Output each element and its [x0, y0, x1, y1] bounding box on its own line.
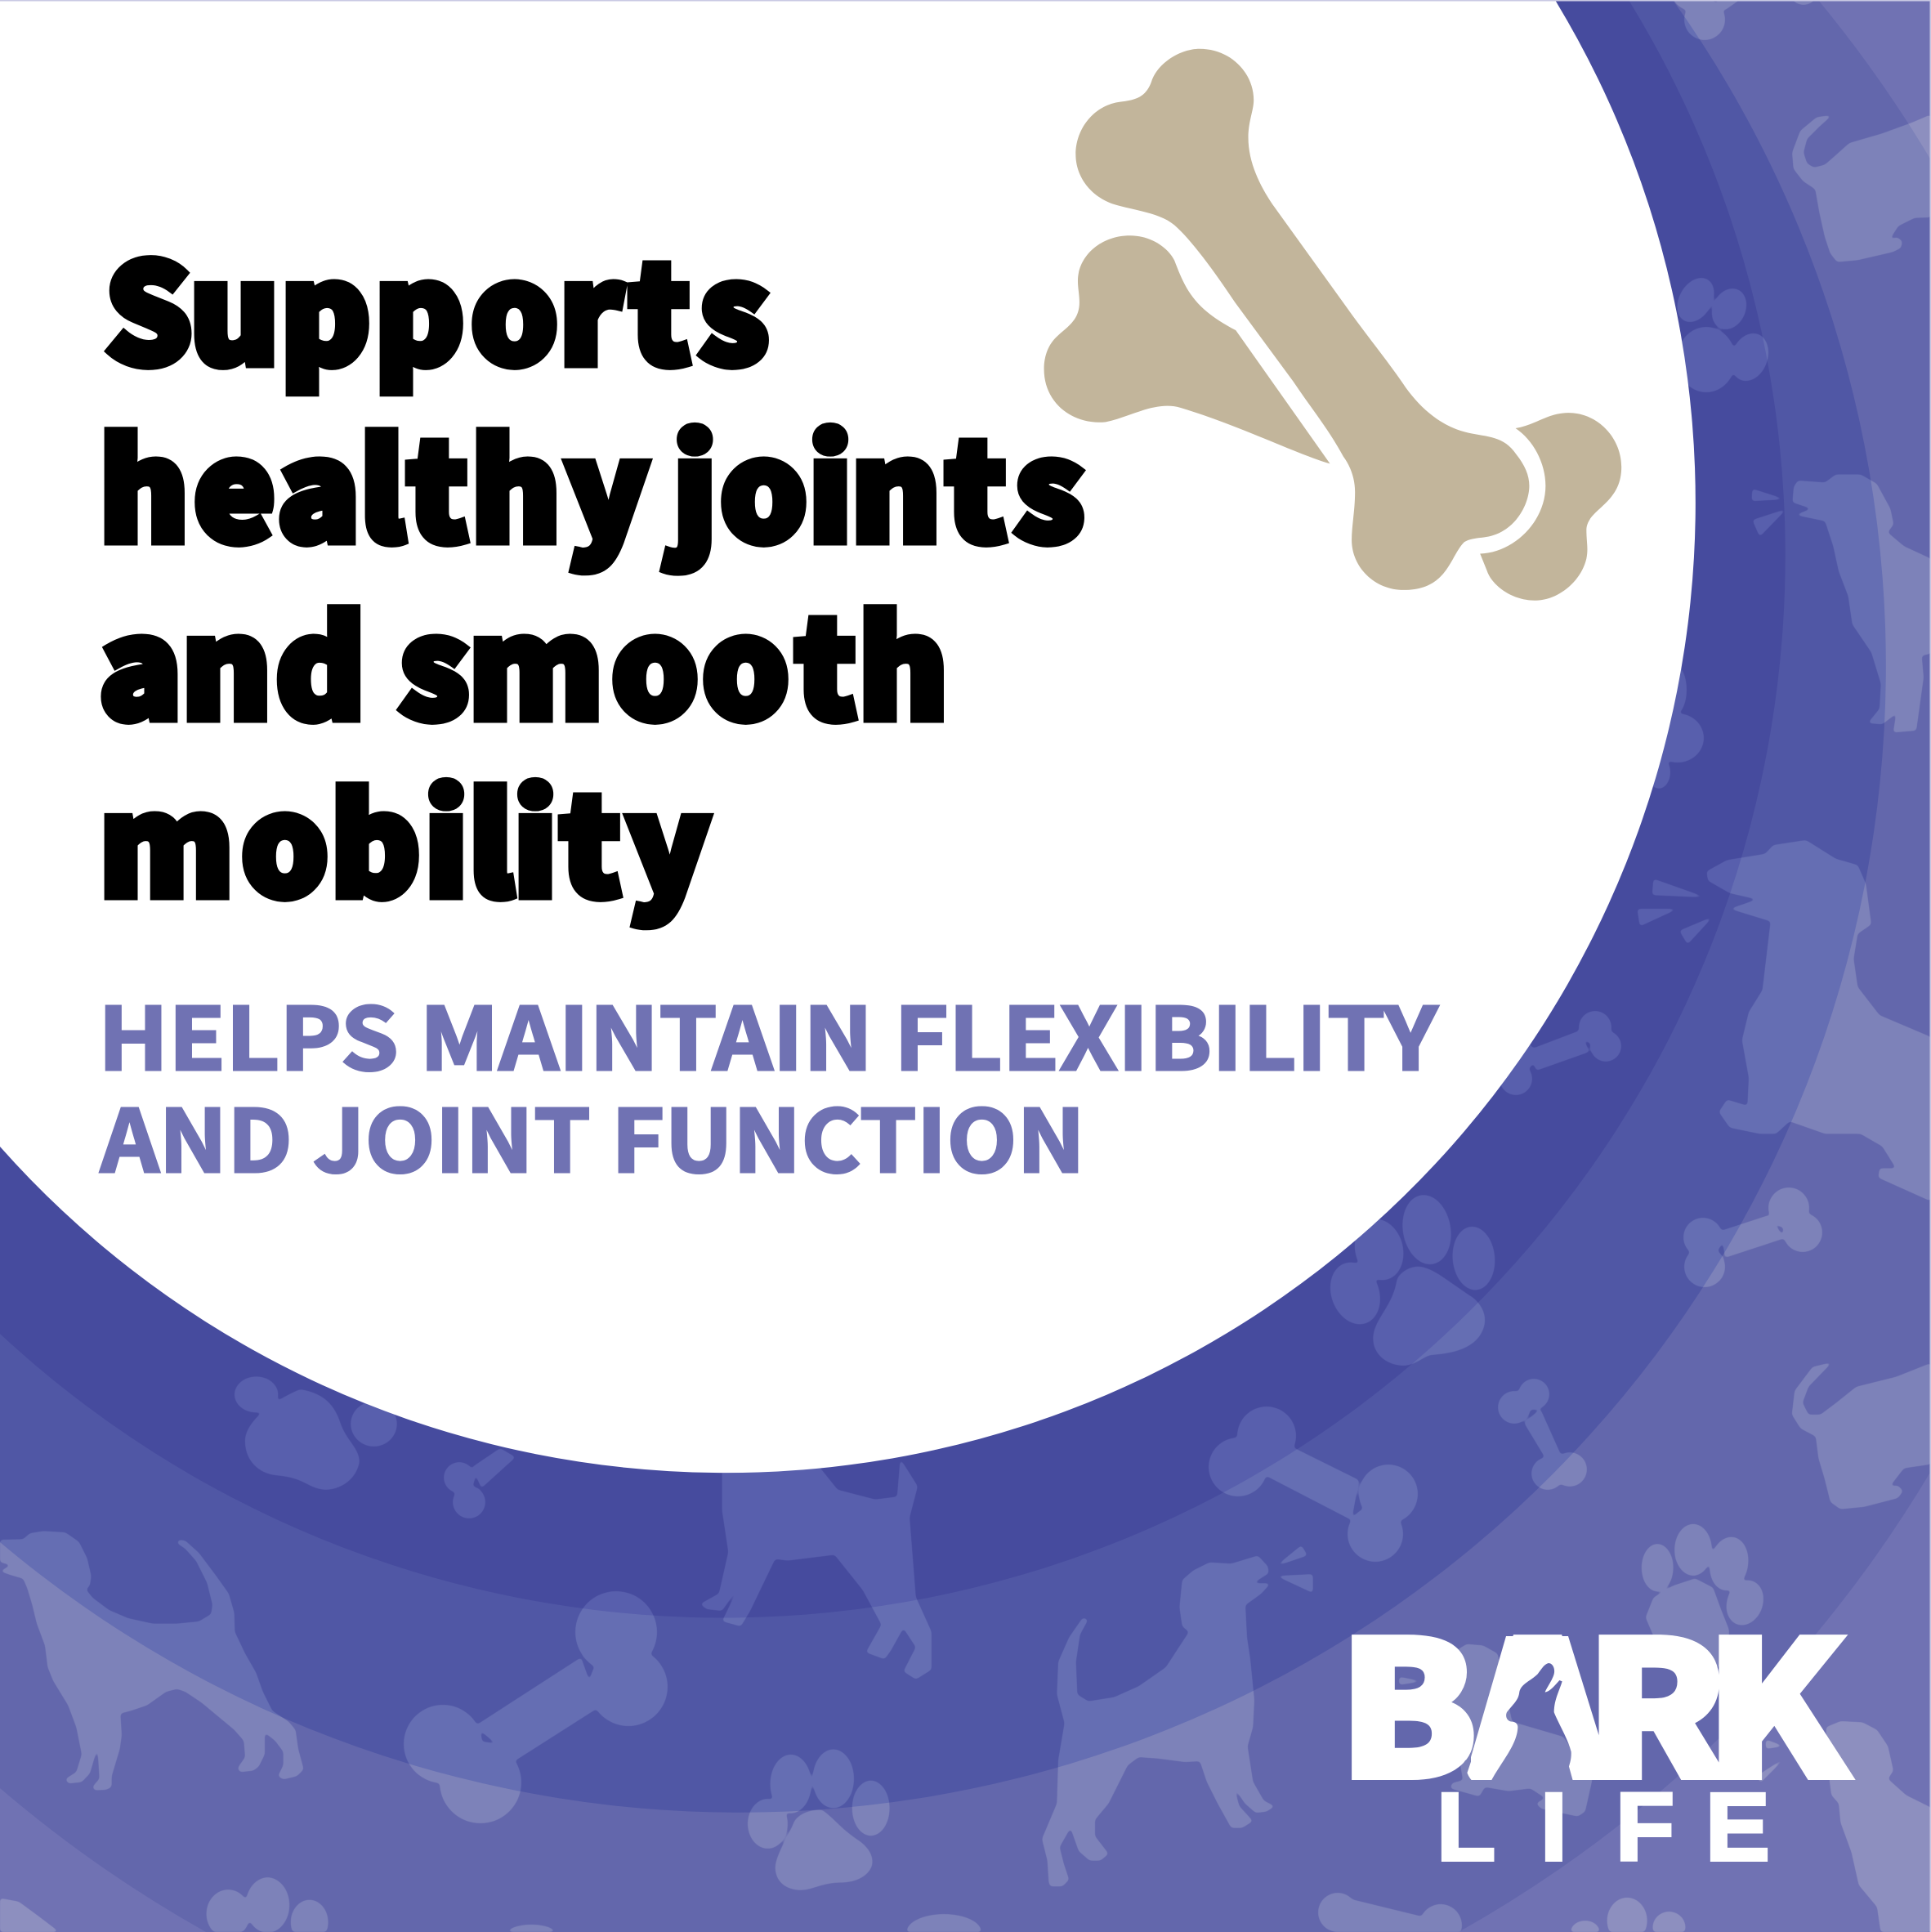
logo: Bark Life: [1352, 1635, 1856, 1862]
bone: main fragment: [1075, 49, 1529, 590]
logo wordmark: LIFE: LIFE: [1437, 1773, 1770, 1881]
paw print: bottom centre-left: [748, 1749, 890, 1890]
bone: small, centre right: [1498, 1379, 1587, 1490]
bone: right fragment: [1480, 413, 1621, 601]
dog silhouette: right side, large: [1637, 840, 1931, 1201]
title: Supports: [105, 205, 769, 404]
bone: beside white circle: [1500, 1011, 1621, 1095]
bone: top right edge: [1671, 0, 1818, 40]
paw print: bottom left edge: [206, 1877, 981, 1932]
bone: under white circle: [444, 1448, 516, 1518]
dog fragment: bottom left corner: [0, 1898, 60, 1932]
icon: broken bone: [1044, 49, 1621, 601]
paw print: bottom right edge: [1571, 1898, 1686, 1932]
white circle panel: [0, 0, 1696, 1473]
bone: bottom edge: [1318, 1893, 1462, 1932]
subtitle: [98, 971, 1438, 1197]
bone: lower middle: [1209, 1407, 1418, 1562]
title: healthy joints: [99, 382, 1084, 581]
dog silhouette: barking, bottom middle: [1042, 1545, 1313, 1886]
bone: left fragment: [1044, 235, 1330, 463]
dog silhouette: top right rear: [1792, 114, 1931, 262]
ring: dark band: [0, 0, 1786, 1617]
paw print: right of white circle: [1322, 1191, 1497, 1366]
logo wordmark: BARK: BARK: [1338, 1562, 1850, 1831]
dog silhouette: bottom left: [0, 1531, 304, 1791]
paw print: right mid: [1647, 665, 1704, 789]
subtitle: HELPS MAINTAIN FLEXIBILITY: [98, 971, 1438, 1095]
title: mobility: [99, 737, 709, 936]
dog silhouette: right side rear: [1792, 1362, 1931, 1509]
bone: right edge: [1683, 1187, 1822, 1287]
paw print: top right: [1670, 271, 1775, 392]
paw print: above logo: [1642, 1524, 1769, 1673]
dog silhouette: bottom centre: [700, 1459, 932, 1679]
bone: bottom left large: [404, 1591, 668, 1823]
dog silhouette: right side, small: [1751, 474, 1931, 732]
dog silhouette: bottom right: [1826, 1721, 1931, 1932]
subtitle: AND JOINT FUNCTION: [100, 1073, 1085, 1197]
title: [99, 205, 1084, 936]
paw print: below white circle, left: [235, 1376, 397, 1490]
logo wordmark: BARK: [1352, 1635, 1856, 1780]
title: and smooth: [99, 560, 949, 758]
dog silhouette: behind logo: [1399, 1644, 1788, 1817]
